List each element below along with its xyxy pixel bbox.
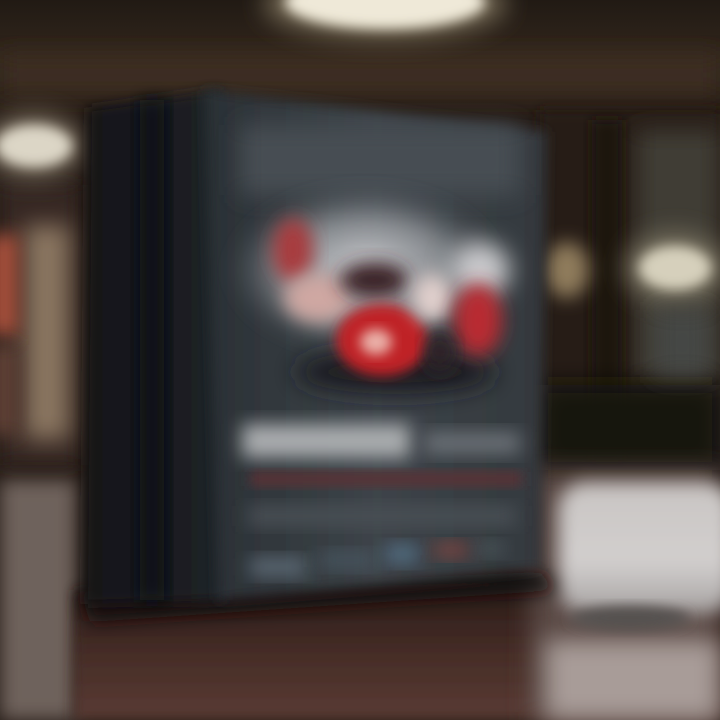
box shadow: [80, 572, 560, 622]
box front panel: [205, 90, 546, 600]
product box: [80, 90, 560, 622]
ceiling light: [263, 0, 507, 40]
box title: [242, 424, 520, 458]
car left fender: [273, 218, 313, 282]
right wall lights: [545, 232, 720, 375]
car roof: [340, 262, 408, 298]
logo strip: [250, 542, 504, 576]
car body: [336, 304, 428, 376]
wooden table: [0, 470, 720, 720]
white cup: [558, 482, 720, 630]
left wall picture and lamp: [0, 112, 84, 465]
box side panel: [84, 90, 226, 604]
grey text lines: [248, 506, 516, 526]
car shadow: [295, 350, 495, 394]
red subtitle band: [250, 472, 522, 486]
car artwork: [225, 185, 510, 394]
car right fender: [454, 284, 502, 356]
smoke behind car: [225, 185, 505, 355]
